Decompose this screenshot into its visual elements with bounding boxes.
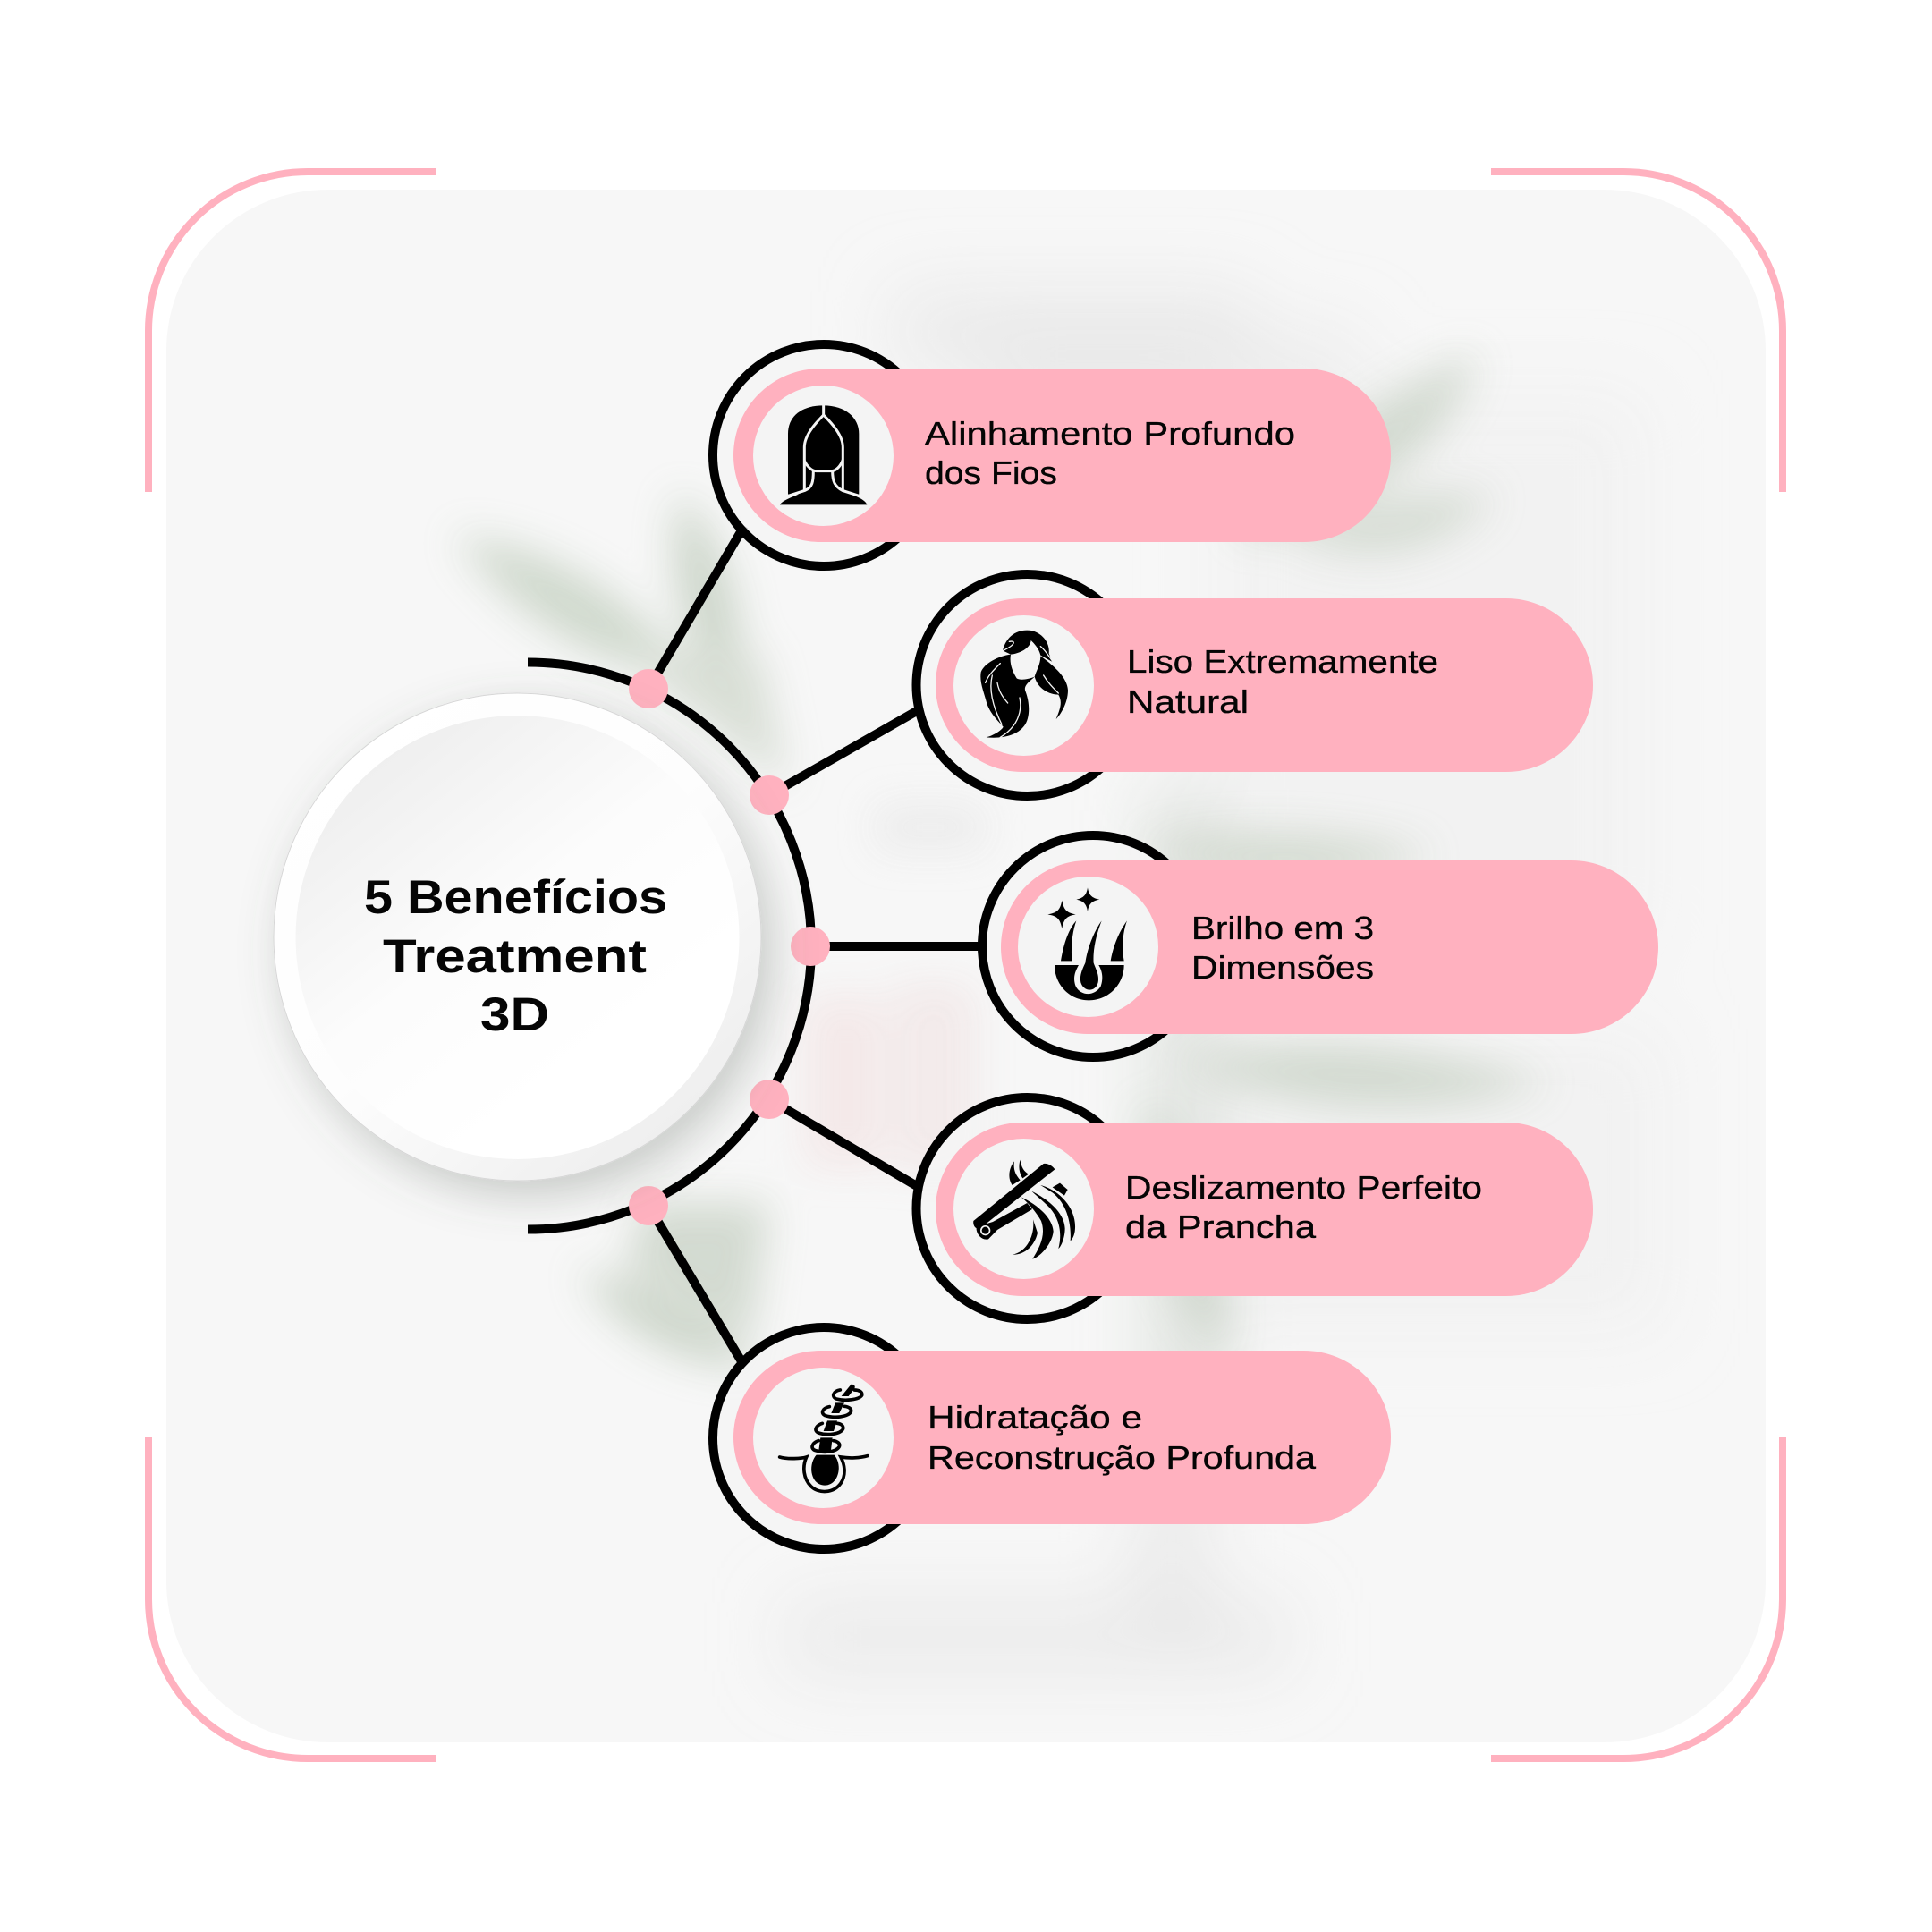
benefit 1: alinhamento (713, 344, 1391, 566)
label: Dimensões (1191, 949, 1374, 986)
central disc with title (274, 692, 762, 1181)
benefit 2: liso natural (916, 574, 1593, 796)
label: Hidratação e (928, 1399, 1142, 1436)
benefit 5: hidratação (713, 1327, 1391, 1549)
label: Reconstrução Profunda (928, 1439, 1317, 1476)
connector lines (648, 526, 984, 1366)
benefit 4: prancha (916, 1097, 1593, 1319)
connector dots (629, 669, 830, 1225)
label: Brilho em 3 (1191, 910, 1374, 946)
label: Liso Extremamente (1127, 643, 1438, 680)
icon: woman with straight hair (780, 405, 867, 504)
icon: shiny hair follicle (1047, 887, 1127, 1000)
decorative pink corner frame (148, 172, 1783, 1758)
label: dos Fios (925, 454, 1057, 491)
background panel (166, 190, 1766, 1742)
benefit 3: brilho (982, 835, 1658, 1057)
label: Natural (1127, 683, 1249, 720)
blurred product photo in the background (459, 299, 1555, 1660)
label: Alinhamento Profundo (925, 415, 1295, 452)
icon: flat iron and hair (973, 1160, 1075, 1259)
label: Deslizamento Perfeito (1125, 1169, 1482, 1206)
title: 5 Benefícios (364, 871, 667, 924)
icon: hair follicle with hydration rings (780, 1385, 868, 1492)
label: da Prancha (1125, 1208, 1317, 1245)
icon: flowing hair (980, 631, 1068, 738)
title: 3D (480, 988, 549, 1041)
semicircular connector arc (528, 662, 811, 1229)
title: Treatment (383, 930, 647, 983)
